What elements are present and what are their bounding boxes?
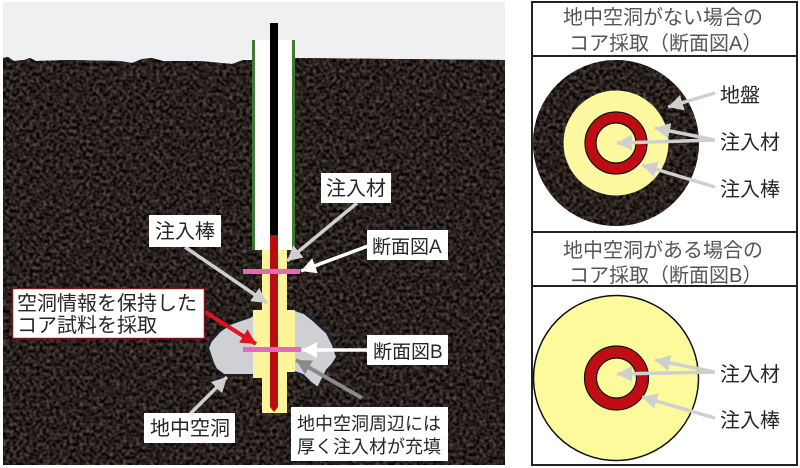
ground disc — [530, 58, 702, 230]
arrow: section B — [302, 348, 368, 352]
section line B — [243, 347, 301, 352]
label: rod: 注入棒 — [720, 178, 780, 201]
label: section B — [367, 335, 448, 365]
injection rod assembly — [252, 23, 295, 413]
injection material disc — [534, 296, 698, 460]
label: rod: 注入棒 — [720, 409, 780, 432]
injection rod ring — [590, 352, 642, 404]
panel: section B diagram — [532, 286, 797, 465]
label: cavity — [144, 413, 235, 443]
cavity: underground void — [208, 310, 337, 388]
panel: section A title: 地中空洞がない場合の — [563, 6, 763, 29]
arrow: material outer — [655, 128, 715, 140]
outer casing with green walls — [252, 40, 295, 250]
label: injection rod — [149, 215, 221, 247]
arrow: core sample — [205, 312, 256, 344]
label: core sample callout: コア試料を採取 — [17, 314, 157, 337]
label: thick fill around cavity: 地中空洞周辺には — [297, 414, 441, 434]
arrow: rod — [642, 397, 715, 418]
arrow: material outer — [655, 360, 715, 372]
red rod — [270, 235, 278, 412]
arrow: material inner — [617, 372, 715, 374]
arrow: thick fill — [296, 360, 362, 398]
label: material: 注入材 — [720, 131, 780, 154]
black rod — [270, 23, 278, 236]
label: material: 注入材 — [720, 363, 780, 386]
panel: section A diagram — [530, 56, 797, 232]
panel: soil cross-section background — [3, 2, 505, 466]
arrow: injection rod — [185, 247, 267, 303]
section line A — [243, 269, 300, 274]
label: thick fill around cavity: 厚く注入材が充填 — [297, 437, 441, 457]
panel: section A title — [532, 2, 797, 56]
label: cavity: 地中空洞 — [150, 417, 230, 440]
label: injection material — [321, 173, 391, 203]
arrow: cavity — [190, 377, 227, 414]
arrow: section A — [301, 246, 368, 271]
label: injection material: 注入材 — [326, 177, 386, 200]
injection rod ring — [590, 118, 642, 168]
label: injection rod: 注入棒 — [155, 220, 215, 243]
injection material column — [253, 250, 295, 413]
label: core sample callout — [12, 288, 204, 338]
panel: section B title: コア採取（断面図B） — [569, 264, 762, 287]
label: section A: 断面図A — [372, 236, 442, 258]
panel: section B title: 地中空洞がある場合の — [563, 239, 763, 262]
label: thick fill around cavity — [291, 407, 448, 461]
arrow: ground — [668, 93, 715, 107]
label: core sample callout: 空洞情報を保持した — [17, 292, 197, 315]
injection material disc — [564, 90, 668, 196]
arrow: injection material — [287, 203, 357, 261]
label: ground: 地盤 — [720, 84, 760, 107]
panel: section A title: コア採取（断面図A） — [569, 32, 762, 55]
arrow: rod — [642, 165, 715, 187]
label: section A — [367, 230, 448, 260]
label: section B: 断面図B — [373, 341, 443, 363]
arrow: material inner — [617, 140, 715, 143]
panel: section B title — [532, 232, 797, 287]
